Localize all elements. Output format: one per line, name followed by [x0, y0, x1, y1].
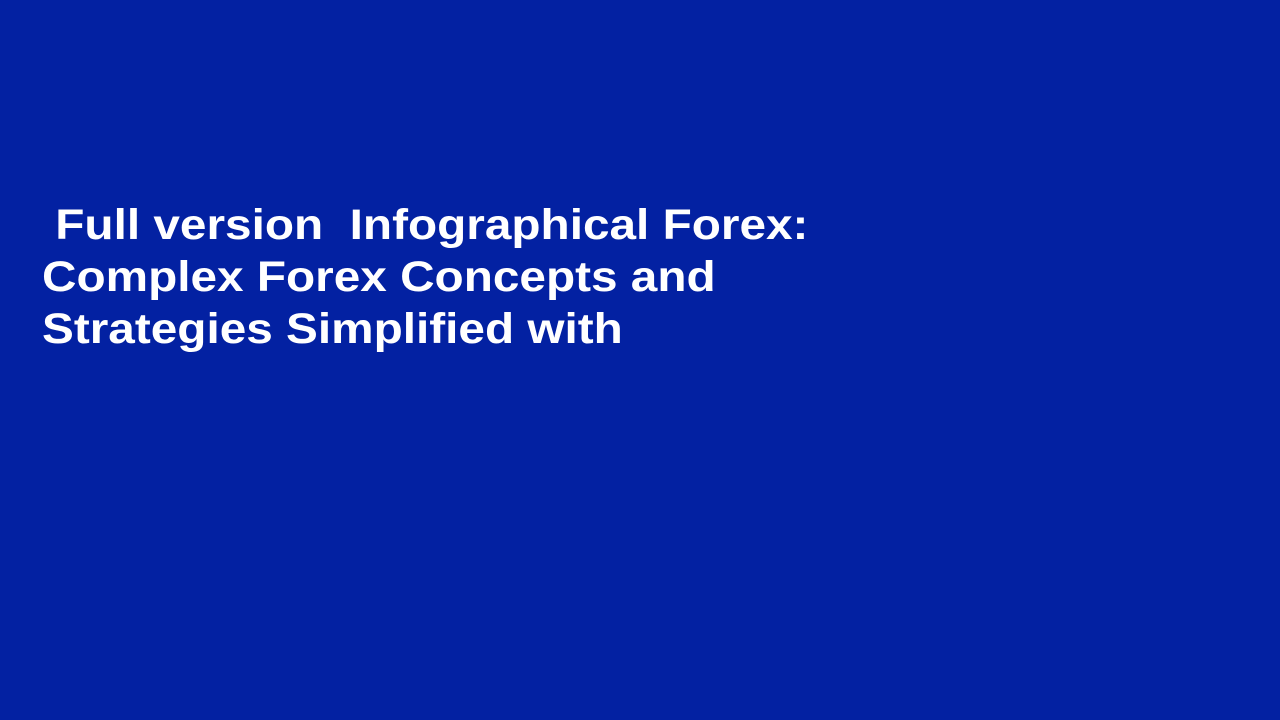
title: Full version Infographical Forex:: [55, 201, 808, 249]
title: Complex Forex Concepts and: [42, 253, 716, 301]
title: [42, 201, 808, 353]
title: Strategies Simplified with: [42, 305, 623, 353]
